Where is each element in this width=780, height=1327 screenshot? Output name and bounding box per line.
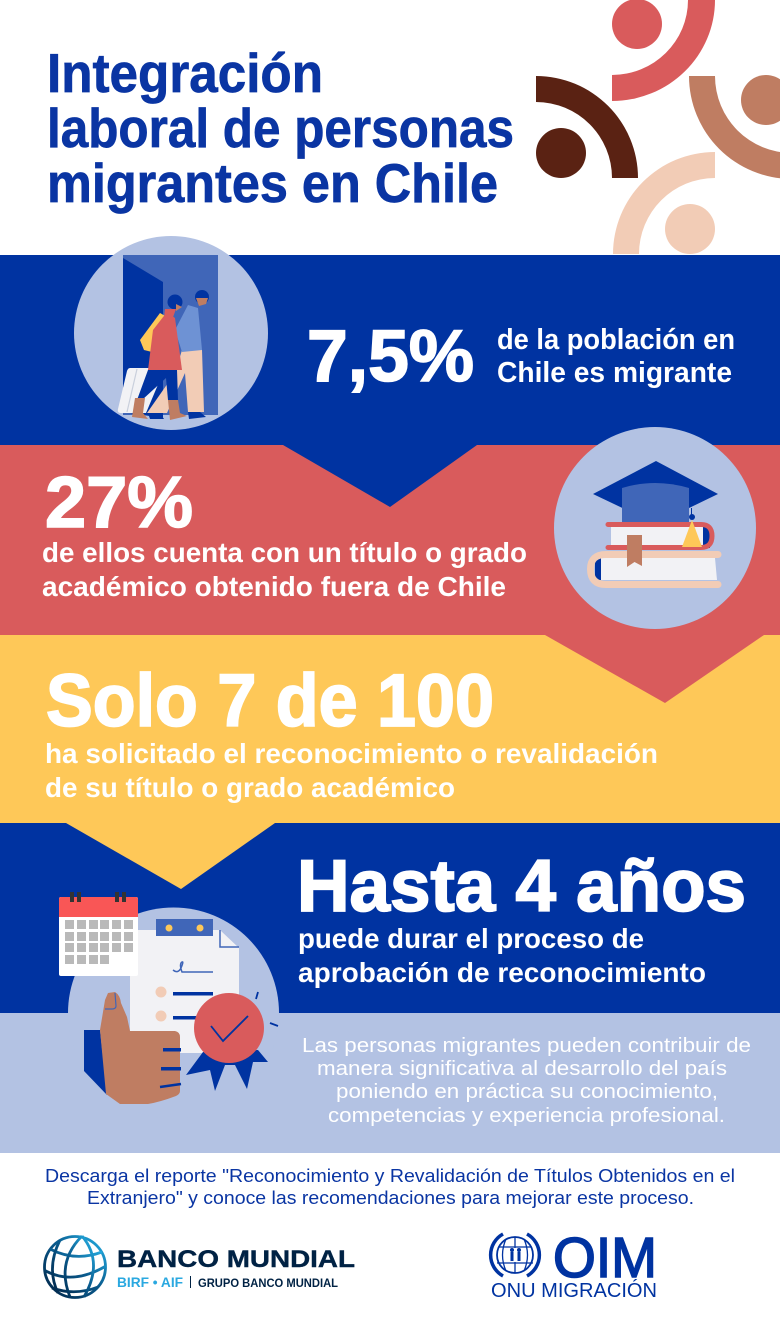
shoes [148, 413, 164, 419]
chevron: navy [283, 445, 477, 507]
stat: solo 7 de 100: de su título o grado académico [45, 772, 455, 803]
band: contribution message [0, 1013, 780, 1153]
stat: hasta 4 años: Hasta 4 años [297, 846, 746, 927]
contribution message: manera significativa al desarrollo del país [317, 1057, 727, 1080]
woman coat [148, 312, 182, 370]
contribution message: competencias y experiencia profesional. [328, 1104, 725, 1127]
logo: Banco Mundial [44, 1236, 355, 1298]
man trousers [147, 350, 204, 413]
band: degree holders [0, 445, 780, 635]
stat: 27% with degree: de ellos cuenta con un título o grado [42, 537, 527, 568]
thumbs up hand [84, 992, 181, 1104]
logo: OIM: OIM [553, 1226, 657, 1290]
download note: Descarga el reporte "Reconocimiento y Revalidación de Títulos Obtenidos en el [45, 1166, 735, 1186]
stat: 27% with degree: 27% [45, 463, 193, 543]
stat: 27% with degree [42, 463, 527, 602]
backpack [140, 313, 167, 352]
band: revalidation requests [0, 635, 780, 823]
title: laboral de personas [47, 97, 514, 159]
logo: OIM [491, 1226, 657, 1302]
title [47, 42, 514, 214]
logo: Banco Mundial: BANCO MUNDIAL [117, 1246, 355, 1273]
stat: 7,5% of population: de la población en [497, 324, 735, 356]
icon: approval document with calendar, thumb and seal [59, 892, 279, 1118]
woman legs [137, 370, 178, 400]
decorative arcs and circles [536, 0, 780, 254]
logo: Banco Mundial: GRUPO BANCO MUNDIAL [198, 1278, 338, 1290]
stat: solo 7 de 100 [45, 659, 658, 803]
contribution message: Las personas migrantes pueden contribuir de [302, 1034, 751, 1057]
contribution message [302, 1034, 751, 1127]
chevron: red [545, 635, 764, 703]
title: Integración [47, 42, 323, 104]
man torso [175, 305, 202, 352]
stat: 7,5% of population: Chile es migrante [497, 357, 732, 389]
chevron: yellow [66, 823, 275, 889]
stat: solo 7 de 100: ha solicitado el reconocimiento o revalidación [45, 738, 658, 769]
download note: Extranjero" y conoce las recomendaciones para mejorar este proceso. [87, 1188, 694, 1208]
stat: hasta 4 años: puede durar el proceso de [298, 923, 644, 954]
band: population [0, 255, 780, 445]
stat: solo 7 de 100: Solo 7 de 100 [46, 659, 494, 742]
stat: 7,5% of population [307, 316, 735, 397]
contribution message: poniendo en práctica su conocimiento, [336, 1080, 718, 1103]
seal with ribbon [186, 992, 278, 1091]
icon: graduation cap on books [554, 427, 756, 629]
icon: migrants walking through a door [74, 236, 268, 430]
stat: 7,5% of population: 7,5% [307, 316, 474, 397]
stat: hasta 4 años: aprobación de reconocimiento [298, 957, 706, 988]
logo: Banco Mundial: BIRF • AIF [117, 1274, 183, 1290]
stat: 27% with degree: académico obtenido fuera de Chile [42, 571, 506, 602]
logo: OIM: ONU MIGRACIÓN [491, 1279, 657, 1302]
title: migrantes en Chile [47, 152, 498, 214]
band: approval duration [0, 823, 780, 1013]
download note [45, 1166, 735, 1208]
stat: hasta 4 años [297, 846, 746, 988]
calendar [59, 892, 138, 976]
suitcase [118, 368, 165, 413]
document [130, 919, 239, 1053]
